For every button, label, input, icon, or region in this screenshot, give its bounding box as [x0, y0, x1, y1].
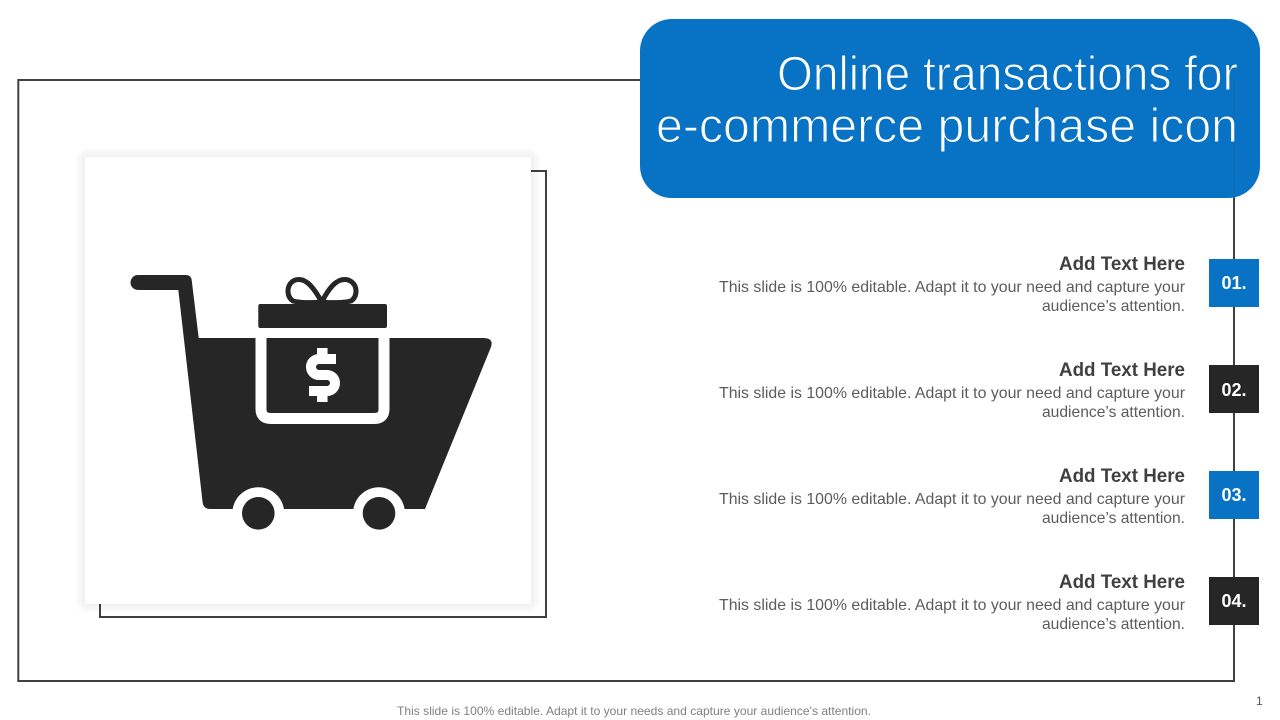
item 04: audience’s attention. [1042, 616, 1185, 633]
title text [656, 48, 1238, 153]
item 02: 02. [1221, 380, 1247, 400]
item 03 [719, 466, 1259, 527]
item 04: This slide is 100% editable. Adapt it to your need and capture your [719, 597, 1186, 614]
title banner [640, 19, 1260, 198]
item 02: audience’s attention. [1042, 404, 1185, 421]
icon: shopping cart with gift and dollar [131, 275, 492, 539]
item 01 [719, 254, 1259, 315]
item 03: 03. [1221, 485, 1247, 505]
item 03: Add Text Here [1059, 466, 1185, 487]
item 04: 04. [1221, 591, 1247, 611]
item 01: 01. [1221, 273, 1247, 293]
back offset frame [100, 171, 546, 617]
title text: Online transactions for [777, 48, 1238, 101]
item 01: This slide is 100% editable. Adapt it to your need and capture your [719, 279, 1186, 296]
title text: e-commerce purchase icon [656, 100, 1238, 153]
gift lid [258, 304, 387, 328]
item 03: audience’s attention. [1042, 510, 1185, 527]
footer note: This slide is 100% editable. Adapt it to your needs and capture your audience's attention. [397, 704, 871, 718]
gift bow [288, 280, 356, 303]
gift box cutout [261, 338, 384, 418]
item 01: audience’s attention. [1042, 298, 1185, 315]
outer frame [18, 80, 1234, 681]
item 04 [719, 572, 1259, 633]
item 02: This slide is 100% editable. Adapt it to your need and capture your [719, 385, 1186, 402]
item 02 [719, 360, 1259, 421]
item 03: This slide is 100% editable. Adapt it to your need and capture your [719, 491, 1186, 508]
panel: icon card [81, 153, 535, 608]
dollar sign [309, 348, 336, 402]
item 04: Add Text Here [1059, 572, 1185, 593]
item 01: Add Text Here [1059, 254, 1185, 275]
item 02: Add Text Here [1059, 360, 1185, 381]
cart body [131, 275, 492, 509]
wheels [232, 487, 405, 539]
page number: 1 [1256, 694, 1263, 708]
